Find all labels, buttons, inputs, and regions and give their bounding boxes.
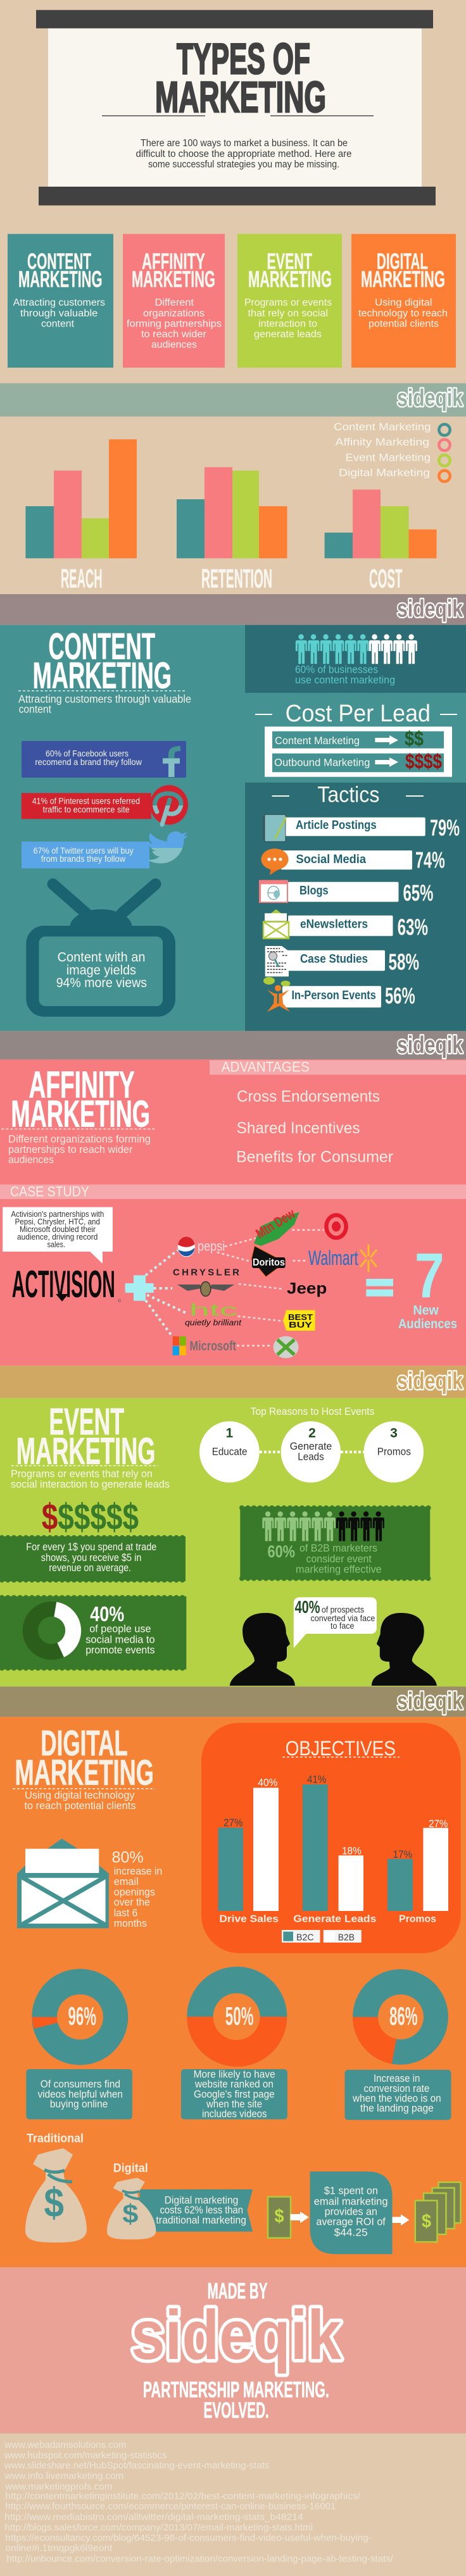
stat: twitter: from brands they follow xyxy=(41,854,126,864)
legend: Event Marketing xyxy=(345,451,431,463)
bars: generate leads: 18% xyxy=(342,1845,362,1857)
heading: event marketing xyxy=(11,1401,170,1490)
heading: digital marketing xyxy=(13,1723,155,1812)
tactic: social media: Social Media xyxy=(296,853,366,866)
heading: affinity marketing: AFFINITY xyxy=(29,1064,135,1106)
caption: 96%: videos helpful when xyxy=(38,2089,123,2100)
arrow xyxy=(393,2214,409,2225)
caption: 96%: Of consumers find xyxy=(41,2079,120,2090)
chart legend: B2B xyxy=(338,1932,355,1943)
sources list: www.marketingprofs.com xyxy=(4,2481,112,2492)
icon: talking person xyxy=(263,977,290,1012)
callout: activision partnerships: audience, driving record xyxy=(17,1232,98,1241)
advantages list: Benefits for Consumer xyxy=(236,1148,393,1166)
logo: jeep: Jeep xyxy=(287,1280,327,1298)
stat: social media donut: promote events xyxy=(85,1644,155,1656)
bar chart: retention xyxy=(177,467,287,593)
logo: best buy xyxy=(283,1310,315,1331)
roi callout: provides an xyxy=(325,2206,377,2218)
stat: email openings: email xyxy=(114,1876,139,1888)
callout: activision partnerships: Pepsi, Chrysler, HTC, and xyxy=(15,1217,100,1226)
logo: best buy: BEST xyxy=(288,1313,313,1322)
tactic: in-person events: 56% xyxy=(385,983,415,1009)
stat: social media donut: 40% xyxy=(90,1602,124,1626)
arrow xyxy=(375,735,398,745)
logo: target xyxy=(326,1215,346,1238)
stat: email openings: openings xyxy=(114,1886,155,1898)
icon: single bill xyxy=(268,2197,291,2238)
card: digital marketing xyxy=(351,234,456,368)
icon: open envelope xyxy=(17,1839,109,1928)
donut chart: 40% xyxy=(23,1602,81,1660)
divider band with sideqik logo xyxy=(0,1366,466,1398)
card: event marketing: generate leads xyxy=(254,329,322,340)
heading: tactics: Tactics xyxy=(317,782,379,807)
icon: speech bubble xyxy=(261,849,289,875)
divider band with sideqik logo xyxy=(0,594,466,625)
stat: social media donut xyxy=(0,1596,186,1669)
bar chart: cost: COST xyxy=(369,563,403,593)
sources list: http://contentmarketinginstitute.com/2012/02/best-content-marketing-infographics/ xyxy=(5,2491,361,2501)
reason 3 xyxy=(364,1421,424,1483)
bars: drive sales: 27% xyxy=(224,1817,243,1829)
card: digital marketing: potential clients xyxy=(368,318,439,329)
stat: email openings: 80% xyxy=(111,1848,144,1866)
donut: 86%: 86% xyxy=(389,2001,418,2031)
logo: htc: htc xyxy=(189,1300,238,1319)
bar chart: retention: RETENTION xyxy=(201,563,272,593)
callout: face to face: to face xyxy=(331,1621,355,1631)
logo: htc: quietly brilliant xyxy=(185,1319,242,1328)
tactic: in-person events: In-Person Events xyxy=(291,989,376,1002)
card: content marketing: MARKETING xyxy=(18,266,103,292)
card: event marketing: MARKETING xyxy=(248,266,332,292)
bar chart: reach: REACH xyxy=(61,563,103,593)
advantages list: ADVANTAGES xyxy=(222,1059,310,1074)
legend xyxy=(334,421,450,482)
card: affinity marketing: Different xyxy=(154,297,194,308)
bars: generate leads: 41% xyxy=(307,1774,326,1786)
roi callout: average ROI of xyxy=(316,2216,386,2228)
card: content marketing: through valuable xyxy=(20,308,98,319)
divider band with sideqik logo xyxy=(0,383,466,416)
logo: chrysler xyxy=(173,1267,239,1296)
panel: objectives chart xyxy=(201,1723,461,1953)
reason 2 xyxy=(281,1421,341,1483)
tactic: case studies xyxy=(265,946,419,976)
cost per lead comparison: Content Marketing xyxy=(275,735,360,747)
icon: television with stat: Content with an xyxy=(58,950,145,964)
stat: social media donut: social media to xyxy=(85,1633,155,1645)
reason 1: 1 xyxy=(226,1426,234,1440)
cost per lead comparison: $$$$ xyxy=(405,750,442,773)
stat: trade show return: For every 1$ you spend at trade xyxy=(26,1541,156,1553)
icon: two heads talking xyxy=(230,1597,437,1686)
arrow xyxy=(375,757,398,767)
bars: promos: Promos xyxy=(399,1913,436,1924)
logo: sideqik: sideqik xyxy=(131,2296,342,2374)
panel: affinity marketing xyxy=(0,1059,466,1366)
card: content marketing: Attracting customers xyxy=(13,297,105,308)
result: 7 new audiences: New xyxy=(413,1303,439,1317)
stat: trade show return: revenue on average. xyxy=(49,1562,131,1574)
card: affinity marketing: AFFINITY xyxy=(142,249,205,274)
heading: event marketing: Programs or events that rely on xyxy=(11,1467,153,1479)
logo: doritos xyxy=(251,1246,286,1277)
bar chart: cost xyxy=(325,490,437,593)
card: event marketing: interaction to xyxy=(258,318,317,329)
bars: generate leads xyxy=(293,1774,376,1924)
heading: event marketing: social interaction to generate leads xyxy=(11,1478,170,1490)
legend: Affinity Marketing xyxy=(336,436,429,448)
traditional money bag: $ xyxy=(44,2179,64,2225)
logo: pepsi xyxy=(178,1237,225,1257)
icon: twitter bird xyxy=(148,831,188,864)
sources list: http://blogs.salesforce.com/company/2013/07/email-marketing-stats.html xyxy=(5,2522,313,2533)
digital money bag xyxy=(107,2162,156,2239)
icon: facebook f xyxy=(163,746,180,777)
icon: notebook xyxy=(264,814,286,842)
heading: affinity marketing: partnerships to reach wider xyxy=(8,1143,133,1155)
advantages list: Shared Incentives xyxy=(237,1119,360,1137)
logo: microsoft xyxy=(173,1336,236,1355)
logo: microsoft: Microsoft xyxy=(190,1339,236,1353)
card: digital marketing: DIGITAL xyxy=(377,249,428,274)
roi callout: $44.25 xyxy=(334,2226,368,2238)
logo: xbox xyxy=(274,1336,299,1358)
stat: pinterest: 41% of Pinterest users referred xyxy=(32,796,140,806)
bar chart: reach xyxy=(25,439,137,593)
stat: businesses using content marketing: use content marketing xyxy=(295,674,395,686)
heading: event marketing: MARKETING xyxy=(16,1431,156,1472)
intro text xyxy=(135,138,352,170)
caption: 50%: website ranked on xyxy=(194,2079,274,2090)
ribbon: digital costs less: Digital marketing xyxy=(165,2194,238,2206)
title: TYPES OF xyxy=(177,34,310,83)
caption: 96%: buying online xyxy=(50,2099,108,2110)
card: affinity marketing: to reach wider xyxy=(141,329,206,340)
tagline xyxy=(143,2377,329,2423)
stat: b2b marketers xyxy=(240,1507,430,1579)
tactic: enewsletters: eNewsletters xyxy=(300,918,368,931)
icon: pinterest p xyxy=(155,793,181,824)
logo: best buy: BUY xyxy=(289,1321,313,1329)
icon: television with stat: 94% more views xyxy=(56,976,147,990)
card: event marketing: EVENT xyxy=(267,249,312,274)
panel: made by sideqik xyxy=(0,2267,466,2434)
reason 2: Generate xyxy=(290,1440,332,1452)
stat: trade show return: $$$$$$ xyxy=(42,1496,139,1538)
arrow xyxy=(291,2212,309,2223)
heading: made by: MADE BY xyxy=(208,2279,267,2304)
card: content marketing: content xyxy=(41,318,75,329)
donut: 96% xyxy=(32,1969,128,2065)
stat: pinterest xyxy=(22,785,188,824)
bars: drive sales: 40% xyxy=(258,1777,277,1789)
stat: b2b marketers: of B2B marketers xyxy=(299,1542,377,1554)
sources list: http://unbounce.com/conversion-rate-optimization/conversion-landing-page-ab-testing-stats/ xyxy=(6,2553,394,2564)
caption: 50%: when the site xyxy=(206,2099,262,2110)
sources list: www.info.livemarketing.com xyxy=(4,2471,123,2482)
donut: 50% xyxy=(187,1967,287,2067)
caption: 50% xyxy=(181,2069,287,2120)
callout: activision partnerships: Microsoft doubled their xyxy=(20,1224,96,1234)
roi callout: $1 spent on xyxy=(324,2185,378,2197)
heading: content marketing: MARKETING xyxy=(33,655,172,696)
logo: activision: ACTIVISION xyxy=(12,1263,115,1305)
stat: twitter: 67% of Twitter users will buy xyxy=(34,845,134,856)
tactic: blogs xyxy=(259,880,433,905)
reason 2: Leads xyxy=(298,1450,324,1463)
icon: document with magnifier xyxy=(265,946,289,976)
caption: 96% xyxy=(26,2069,132,2119)
icon: television with stat: image yields xyxy=(66,963,136,978)
sources list: www.slideshare.net/HubSpot/fascinating-event-marketing-stats xyxy=(4,2460,269,2471)
heading: digital marketing: to reach potential clients xyxy=(24,1800,135,1812)
card: affinity marketing: forming partnerships xyxy=(127,318,222,329)
stat: businesses using content marketing: 60% of businesses xyxy=(295,663,378,675)
title xyxy=(102,34,374,121)
divider band with sideqik logo xyxy=(0,1031,466,1059)
icon: single bill: $ xyxy=(275,2206,284,2227)
tactic: enewsletters xyxy=(263,909,428,940)
stat: facebook xyxy=(22,741,186,778)
tactic: article postings: Article Postings xyxy=(296,819,377,832)
tactic: blogs: 65% xyxy=(403,880,433,905)
heading: digital marketing: DIGITAL xyxy=(41,1723,128,1764)
legend: Digital Marketing xyxy=(339,467,430,479)
advantages list xyxy=(210,1059,466,1166)
tactic: case studies: Case Studies xyxy=(300,953,368,966)
heading: event marketing: EVENT xyxy=(49,1401,124,1443)
callout: activision partnerships: sales. xyxy=(47,1240,65,1249)
icon: browser window xyxy=(259,880,288,903)
card: affinity marketing: organizations xyxy=(143,308,205,319)
heading: digital marketing: MARKETING xyxy=(15,1753,154,1793)
stat: email openings: last 6 xyxy=(114,1907,137,1919)
logo: doritos: Doritos xyxy=(253,1257,285,1268)
donut: 96%: 96% xyxy=(68,2001,96,2031)
reason 1 xyxy=(199,1421,260,1483)
stat: email openings xyxy=(111,1848,162,1929)
tactic: social media: 74% xyxy=(415,847,445,873)
bars: drive sales xyxy=(218,1777,279,1924)
logo: mountain dew: Mtn Dew xyxy=(253,1205,298,1241)
stat: businesses using content marketing xyxy=(295,634,417,686)
bars: promos: 17% xyxy=(393,1848,412,1860)
legend: Content Marketing xyxy=(334,421,431,433)
tactic: enewsletters: 63% xyxy=(398,914,428,940)
reason 3: 3 xyxy=(390,1426,398,1440)
intro text: some successful strategies you may be missing. xyxy=(148,159,339,170)
card: affinity marketing xyxy=(123,234,225,368)
tactic: case studies: 58% xyxy=(389,949,419,975)
panel: right dark blocks xyxy=(245,625,466,1031)
icon: television with stat xyxy=(26,884,175,1017)
callout: activision partnerships xyxy=(3,1207,113,1264)
callout: face to face: converted via face xyxy=(310,1613,375,1623)
card: affinity marketing: audiences xyxy=(151,340,197,351)
callout: face to face: of prospects xyxy=(322,1605,364,1615)
traditional money bag xyxy=(25,2132,87,2243)
tactic: article postings xyxy=(264,814,460,842)
reason 1: Educate xyxy=(212,1445,247,1457)
heading: affinity marketing: audiences xyxy=(8,1154,54,1166)
tactic: social media xyxy=(261,847,445,875)
heading: digital marketing: Using digital technology xyxy=(25,1789,135,1801)
card: content marketing: CONTENT xyxy=(27,249,91,274)
panel: digital marketing xyxy=(0,1717,466,2267)
logo: pepsi: pepsi xyxy=(198,1239,225,1254)
traditional money bag: Traditional xyxy=(27,2132,84,2146)
top reasons to host events xyxy=(199,1405,424,1483)
reason 2: 2 xyxy=(308,1426,316,1440)
callout: face to face xyxy=(294,1597,377,1648)
card: digital marketing: Using digital xyxy=(375,297,432,308)
tagline: PARTNERSHIP MARKETING. xyxy=(143,2377,329,2402)
overview cards xyxy=(8,234,456,368)
icon: stack of bills xyxy=(415,2182,461,2242)
digital money bag: Digital xyxy=(113,2162,148,2175)
top reasons to host events: Top Reasons to Host Events xyxy=(251,1405,374,1417)
stat: email openings: increase in xyxy=(114,1865,162,1877)
reason 3: Promos xyxy=(377,1445,411,1457)
bars: generate leads: Generate Leads xyxy=(293,1913,376,1924)
caption: 50%: includes videos xyxy=(202,2108,267,2120)
case study heading xyxy=(0,1184,466,1200)
stat: b2b marketers: 60% xyxy=(267,1542,295,1561)
sources list: online#i.1tmqpgk6l9eont xyxy=(5,2543,113,2554)
cost per lead comparison xyxy=(265,726,452,777)
cost per lead comparison: $$ xyxy=(405,727,424,750)
sources list: https://econsultancy.com/blog/64523-96-of-consumers-find-video-useful-when-buying- xyxy=(5,2533,372,2544)
sources list: http://www.fourthsource.com/ecommerce/pinterest-can-online-business-16001 xyxy=(5,2501,336,2512)
sources list: www.hubspot.com/marketing-statistics xyxy=(4,2450,167,2461)
caption: 50%: More likely to have xyxy=(194,2069,275,2080)
stat: facebook: 60% of Facebook users xyxy=(46,749,129,759)
heading: content marketing: Attracting customers through valuable xyxy=(18,693,191,706)
heading: affinity marketing: MARKETING xyxy=(11,1093,150,1135)
roi callout: email marketing xyxy=(314,2195,388,2207)
stat: pinterest: traffic to ecommerce site xyxy=(43,804,130,814)
donut: 50%: 50% xyxy=(225,2001,253,2031)
heading: content marketing xyxy=(18,626,191,716)
stat: trade show return: shows, you receive $5 in xyxy=(41,1552,141,1564)
stat: social media donut: of people use xyxy=(89,1623,151,1635)
tagline: EVOLVED. xyxy=(204,2398,269,2423)
partner connection lines xyxy=(146,1230,324,1346)
logo: walmart: Walmart xyxy=(308,1247,358,1269)
callout: face to face: 40% xyxy=(295,1597,320,1617)
stat: facebook: recomend a brand they follow xyxy=(35,757,142,767)
tactic: blogs: Blogs xyxy=(299,884,329,897)
icon: envelope xyxy=(263,909,289,938)
chart legend: B2C xyxy=(296,1932,314,1943)
caption: 86%: the landing page xyxy=(360,2103,434,2114)
title: MARKETING xyxy=(155,73,326,121)
stat: email openings: over the xyxy=(114,1896,150,1908)
heading: cost per lead: Cost Per Lead xyxy=(286,700,431,727)
logo: activision: ® xyxy=(118,1298,122,1304)
bars: promos: 27% xyxy=(429,1817,448,1829)
result: 7 new audiences: 7 xyxy=(415,1240,444,1311)
logo: htc xyxy=(185,1300,242,1328)
advantages list: Cross Endorsements xyxy=(237,1088,380,1105)
callout: activision partnerships: Activision's partnerships with xyxy=(11,1209,104,1219)
caption: 50%: Google's first page xyxy=(194,2089,275,2100)
ribbon: digital costs less xyxy=(140,2189,253,2232)
panel: event marketing xyxy=(0,1398,466,1686)
bars: promos xyxy=(387,1817,448,1924)
stat: b2b marketers: consider event xyxy=(306,1553,372,1565)
caption: 86%: conversion rate xyxy=(363,2083,429,2094)
result: 7 new audiences xyxy=(366,1240,457,1331)
caption: 86%: when the video is on xyxy=(352,2093,441,2104)
card: affinity marketing: MARKETING xyxy=(132,266,215,292)
caption: 86% xyxy=(344,2070,451,2120)
card: event marketing: Programs or events xyxy=(244,297,332,308)
intro text: There are 100 ways to market a business. It can be xyxy=(141,138,348,149)
logo: mountain dew xyxy=(253,1205,299,1246)
card: digital marketing: technology to reach xyxy=(358,308,448,319)
chart legend xyxy=(282,1930,362,1943)
icon: plus sign xyxy=(125,1275,154,1301)
tactic: in-person events xyxy=(263,977,415,1012)
logo: activision xyxy=(12,1263,122,1305)
sources list: http://www.mediabistro.com/alltwitter/digital-marketing-stats_b48214 xyxy=(4,2511,303,2522)
card: content marketing xyxy=(8,234,113,368)
stat: twitter xyxy=(22,831,188,868)
ribbon: digital costs less: traditional marketing xyxy=(156,2215,246,2226)
card: event marketing: that rely on social xyxy=(248,308,328,319)
stat: email openings: months xyxy=(114,1917,147,1929)
icon: stack of bills: $ xyxy=(422,2211,431,2232)
heading: content marketing: CONTENT xyxy=(48,626,155,668)
caption: 86%: Increase in xyxy=(374,2073,420,2084)
sources list: www.webadamsolutions.com xyxy=(4,2439,127,2450)
donut: 86% xyxy=(353,1969,448,2065)
cost per lead comparison: Outbound Marketing xyxy=(274,757,370,769)
logo: chrysler: CHRYSLER xyxy=(173,1267,239,1278)
heading: content marketing: content xyxy=(19,703,51,716)
panel: content marketing xyxy=(0,625,466,1031)
case study heading: CASE STUDY xyxy=(10,1184,89,1200)
heading: objectives: OBJECTIVES xyxy=(286,1737,396,1760)
roi callout xyxy=(310,2172,393,2254)
bars: drive sales: Drive Sales xyxy=(219,1913,279,1924)
heading: affinity marketing: Different organizations forming xyxy=(8,1133,151,1145)
digital money bag: $ xyxy=(122,2199,138,2229)
divider band with sideqik logo xyxy=(0,1686,466,1717)
sources list xyxy=(4,2439,394,2564)
heading: affinity marketing xyxy=(1,1064,155,1166)
card: event marketing xyxy=(237,234,342,368)
title banner xyxy=(36,10,436,206)
ribbon: digital costs less: costs 62% less than xyxy=(160,2205,243,2216)
stat: trade show return xyxy=(0,1496,186,1581)
result: 7 new audiences: Audiences xyxy=(398,1317,457,1331)
intro text: difficult to choose the appropriate method. Here are xyxy=(135,149,352,159)
stat: b2b marketers: marketing effective xyxy=(296,1563,382,1575)
